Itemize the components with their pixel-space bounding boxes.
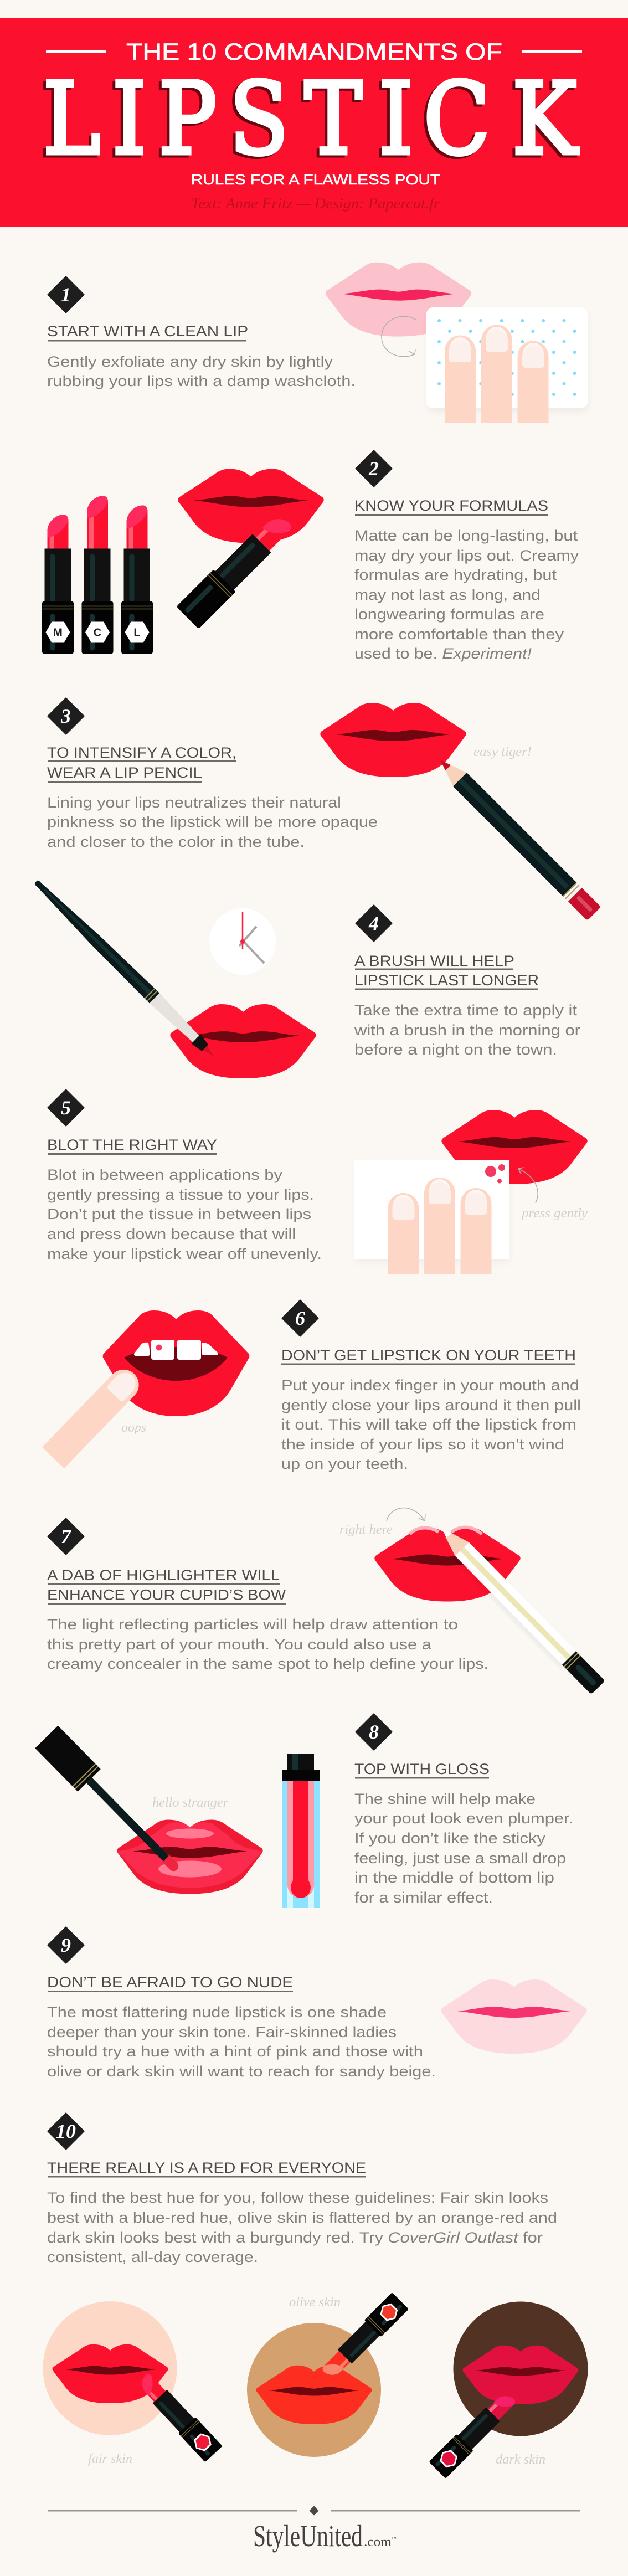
icon: red lips	[178, 469, 324, 543]
body 7	[47, 1616, 488, 1672]
figure: dark skin	[429, 2302, 588, 2479]
body 6: Put your index finger in your mouth and	[281, 1377, 579, 1394]
arrow: press	[518, 1168, 538, 1203]
icon: tissue with fingers	[354, 1160, 509, 1274]
body 2: may not last as long, and	[354, 587, 541, 603]
heading 5: BLOT THE RIGHT WAY	[47, 1137, 217, 1153]
logo: .com	[364, 2535, 392, 2549]
body 5: Don’t put the tissue in between lips	[47, 1206, 311, 1222]
body 4: Take the extra time to apply it	[354, 1002, 578, 1019]
icon: tilted lipstick	[176, 508, 297, 629]
icon: washcloth with fingers	[426, 307, 588, 423]
icon: lip pencil	[434, 753, 601, 921]
body 5: make your lipstick wear off unevenly.	[47, 1246, 322, 1262]
icon: nude lips	[441, 1979, 587, 2054]
badge 9	[48, 1927, 84, 1963]
label: fair skin: fair skin	[88, 2452, 132, 2466]
heading 10: THERE REALLY IS A RED FOR EVERYONE	[47, 2159, 366, 2176]
body 6: it out. This will take off the lipstick from	[281, 1416, 576, 1433]
note: oops: oops	[121, 1421, 146, 1435]
body 9: should try a hue with a hint of pink and those with	[47, 2043, 423, 2060]
body 8: your pout look even plumper.	[354, 1810, 573, 1827]
icon: finger	[42, 1363, 145, 1468]
arrow: circular rub	[382, 316, 416, 357]
badge 4: 4	[368, 912, 379, 934]
badge 10	[48, 2114, 84, 2149]
heading 6: DON’T GET LIPSTICK ON YOUR TEETH	[281, 1347, 576, 1364]
body 2: longwearing formulas are	[354, 606, 544, 623]
badge 1: 1	[61, 284, 71, 306]
body 1	[47, 353, 356, 389]
badge 2: 2	[368, 457, 379, 480]
body 10: dark skin looks best with a burgundy red. Try CoverGirl Outlast for	[47, 2229, 543, 2246]
icon: three lipsticks M C L: L	[133, 627, 141, 639]
badge 8	[356, 1714, 392, 1750]
body 8: in the middle of bottom lip	[354, 1869, 554, 1886]
icon: red lips	[170, 1004, 316, 1078]
body 4: with a brush in the morning or	[354, 1022, 580, 1038]
heading 1: START WITH A CLEAN LIP	[47, 323, 248, 340]
logo: ™	[392, 2536, 397, 2541]
body 5: gently pressing a tissue to your lips.	[47, 1186, 314, 1203]
icon: red lips	[320, 703, 466, 777]
badge 3	[48, 698, 84, 734]
body 10	[47, 2189, 557, 2265]
note: right here: right here	[339, 1523, 393, 1537]
body 2: more comfortable than they	[354, 626, 564, 642]
heading 7	[47, 1567, 286, 1604]
body 9: The most flattering nude lipstick is one shade	[47, 2004, 387, 2020]
badge 5	[48, 1090, 84, 1125]
heading 7: ENHANCE YOUR CUPID’S BOW	[47, 1586, 286, 1603]
body 7: The light reflecting particles will help draw attention to	[47, 1616, 458, 1633]
arrow: right here	[387, 1508, 425, 1521]
heading 3	[47, 744, 236, 782]
body 8: for a similar effect.	[354, 1889, 493, 1906]
panel: step 7	[47, 1508, 605, 1696]
heading 4: LIPSTICK LAST LONGER	[354, 972, 539, 989]
body 8: If you don’t like the sticky	[354, 1830, 546, 1847]
body 9: deeper than your skin tone. Fair-skinned ladies	[47, 2024, 397, 2040]
body 3: Lining your lips neutralizes their natural	[47, 794, 341, 811]
icon: clock	[209, 908, 276, 975]
header banner	[0, 18, 628, 227]
heading 3: TO INTENSIFY A COLOR,	[47, 744, 236, 761]
figure: olive skin	[247, 2292, 409, 2457]
badge 6: 6	[295, 1307, 305, 1329]
heading 3: WEAR A LIP PENCIL	[47, 764, 202, 781]
icon: three lipsticks M C L	[42, 496, 153, 654]
heading 8: TOP WITH GLOSS	[354, 1761, 490, 1777]
body 5: Blot in between applications by	[47, 1166, 283, 1183]
panel: step 10	[43, 2114, 588, 2479]
body 10: consistent, all-day coverage.	[47, 2249, 258, 2265]
heading 9: DON’T BE AFRAID TO GO NUDE	[47, 1974, 293, 1991]
icon: three lipsticks M C L: M	[53, 627, 63, 639]
icon: gloss wand	[35, 1726, 188, 1881]
body 10: To find the best hue for you, follow these guidelines: Fair skin looks	[47, 2189, 548, 2206]
panel: step 2	[42, 451, 579, 662]
panel: step 5	[47, 1090, 588, 1274]
body 6	[281, 1377, 581, 1472]
heading 2: KNOW YOUR FORMULAS	[354, 497, 548, 514]
figure: fair skin	[43, 2301, 223, 2466]
title LIPSTICK: LIPSTICK	[43, 60, 579, 177]
icon: three lipsticks M C L: C	[94, 627, 101, 639]
body 3: pinkness so the lipstick will be more opaque	[47, 814, 378, 830]
panel: step 8	[35, 1714, 573, 1908]
badge 2	[356, 451, 392, 486]
badge 7	[48, 1519, 84, 1554]
note: easy tiger: easy tiger!	[473, 745, 532, 759]
panel: step 9	[47, 1927, 587, 2080]
body 9: olive or dark skin will want to reach for sandy beige.	[47, 2063, 436, 2080]
badge 8: 8	[369, 1721, 379, 1743]
badge 9: 9	[61, 1934, 71, 1956]
label: dark skin: dark skin	[496, 2452, 545, 2467]
icon: glossy lips	[117, 1820, 263, 1894]
body 1: Gently exfoliate any dry skin by lightly	[47, 353, 333, 370]
icon: highlighter pencil	[434, 1523, 605, 1696]
credits: Text: Anne Fritz — Design: Papercut.fr	[191, 196, 440, 212]
badge 6	[282, 1300, 318, 1336]
body 4	[354, 1002, 580, 1058]
note: hello stranger: hello stranger	[152, 1796, 229, 1810]
icon: gloss tube	[282, 1754, 320, 1908]
icon: red lips	[441, 1110, 588, 1184]
body 4: before a night on the town.	[354, 1041, 557, 1058]
body 1: rubbing your lips with a damp washcloth.	[47, 373, 356, 389]
badge 4	[356, 906, 392, 941]
title line: THE 10 COMMANDMENTS OF	[126, 39, 502, 65]
heading 7: A DAB OF HIGHLIGHTER WILL	[47, 1567, 280, 1583]
body 8: The shine will help make	[354, 1791, 536, 1807]
footer	[48, 2506, 580, 2553]
badge 3: 3	[60, 705, 71, 727]
panel: step 1	[47, 263, 588, 423]
panel: step 4	[31, 877, 580, 1078]
body 10: best with a blue-red hue, olive skin is flattered by an orange-red and	[47, 2209, 557, 2226]
body 5	[47, 1166, 322, 1262]
badge 5: 5	[61, 1097, 71, 1119]
icon: open lips with teeth	[103, 1310, 249, 1416]
body 3: and closer to the color in the tube.	[47, 834, 305, 850]
body 6: up on your teeth.	[281, 1456, 408, 1472]
body 7: creamy concealer in the same spot to help define your lips.	[47, 1655, 488, 1672]
icon: lip brush	[31, 877, 219, 1062]
body 2: formulas are hydrating, but	[354, 567, 557, 583]
body 6: the inside of your lips so it won’t wind	[281, 1436, 564, 1453]
heading 4: A BRUSH WILL HELP	[354, 953, 514, 969]
body 5: and press down because that will	[47, 1226, 296, 1242]
title LIPSTICK shadow: LIPSTICK	[40, 63, 576, 179]
body 2	[354, 527, 579, 662]
icon: red lips with highlight	[374, 1527, 521, 1602]
body 9	[47, 2004, 436, 2080]
body 8	[354, 1791, 573, 1906]
body 3	[47, 794, 378, 850]
body 2: Matte can be long-lasting, but	[354, 527, 578, 544]
logo: StyleUnited	[253, 2519, 363, 2553]
body 7: this pretty part of your mouth. You could also use a	[47, 1636, 432, 1653]
badge 7: 7	[61, 1525, 72, 1547]
panel: step 6	[42, 1300, 581, 1472]
panel: step 3	[47, 698, 601, 921]
note: press gently: press gently	[521, 1206, 588, 1221]
body 8: feeling, just use a small drop	[354, 1850, 566, 1867]
heading 4	[354, 953, 539, 989]
icon: pale lips	[326, 263, 471, 337]
label: olive skin: olive skin	[289, 2295, 341, 2310]
badge 1	[48, 277, 84, 312]
badge 10: 10	[56, 2120, 76, 2142]
body 2: used to be. Experiment!	[354, 645, 532, 662]
body 2: may dry your lips out. Creamy	[354, 547, 579, 564]
body 6: gently close your lips around it then pull	[281, 1397, 581, 1413]
subtitle: RULES FOR A FLAWLESS POUT	[191, 171, 440, 188]
